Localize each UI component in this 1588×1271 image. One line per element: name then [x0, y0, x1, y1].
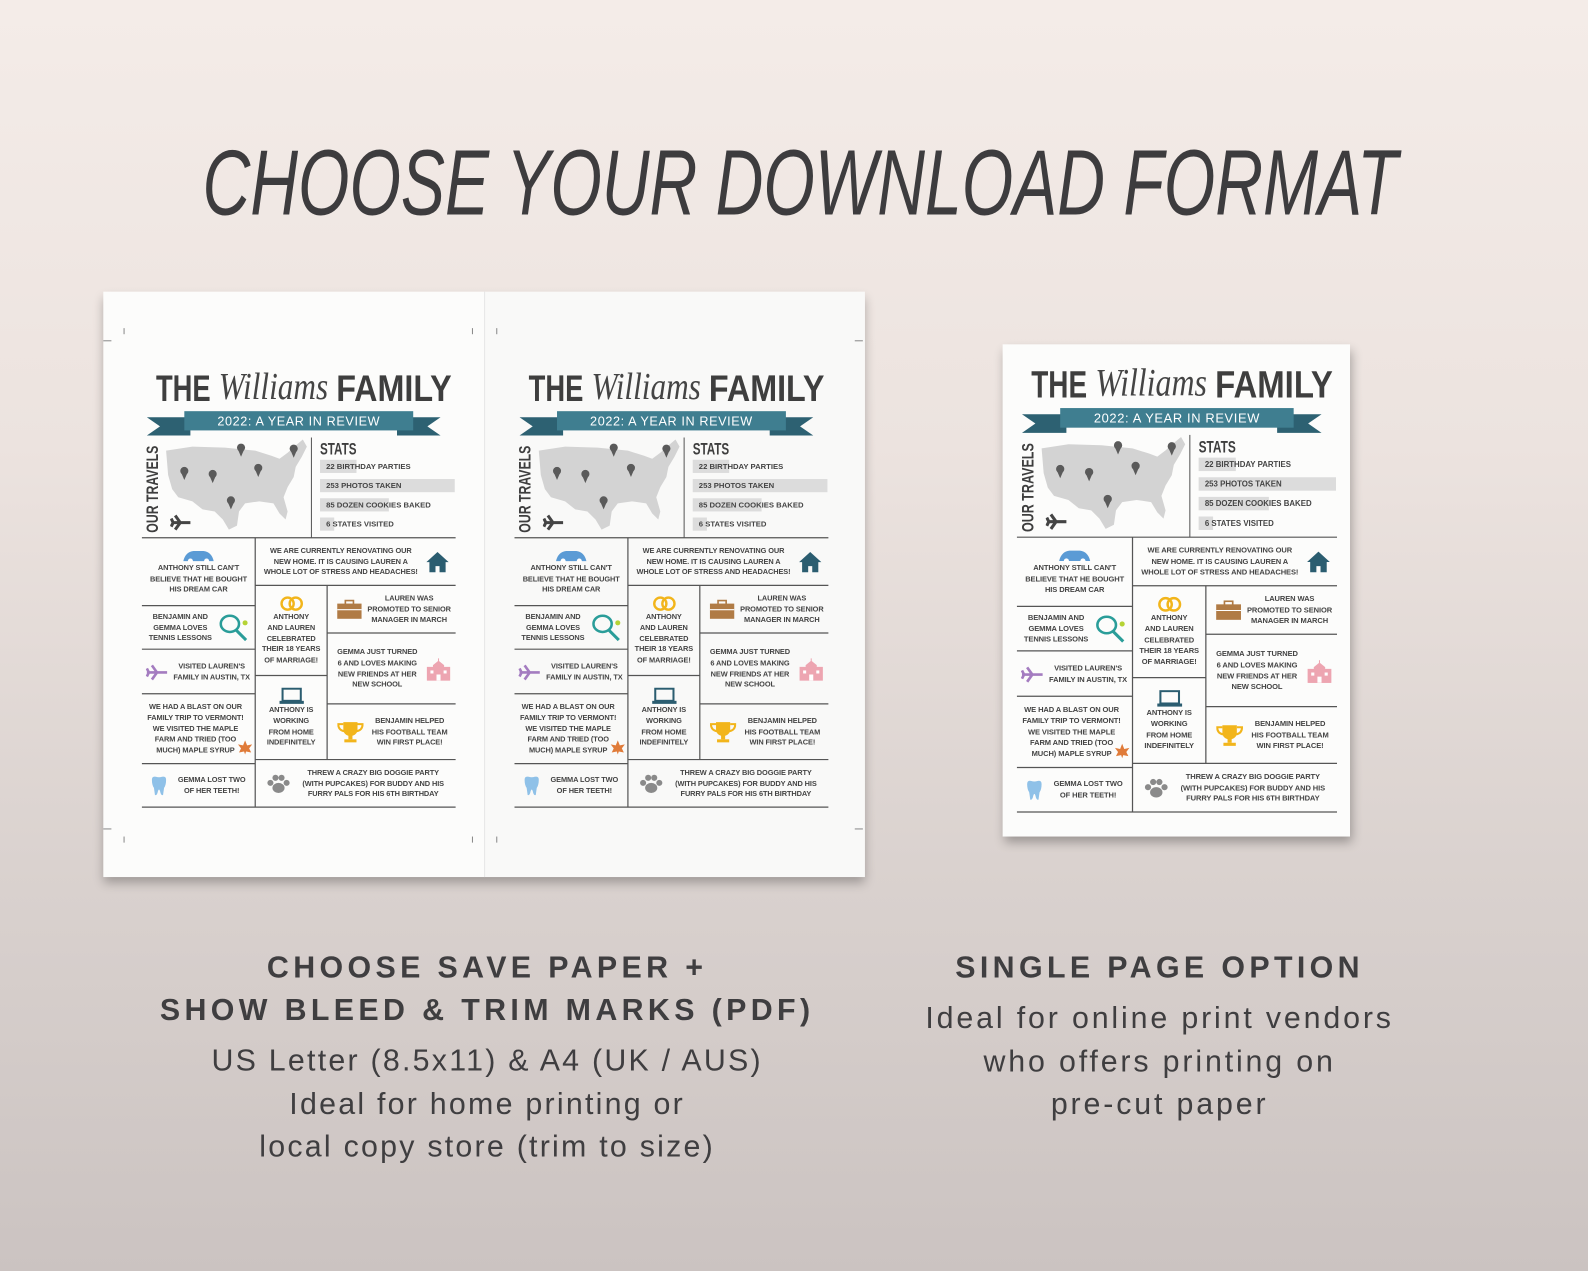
cell: school: NEW SCHOOL — [725, 680, 775, 689]
cell: austin — [146, 661, 250, 681]
cell: vermont: MUCH) MAPLE SYRUP — [1032, 749, 1112, 759]
stats panel: 253 PHOTOS TAKEN — [699, 481, 774, 490]
cell: vermont — [147, 701, 252, 755]
map with pins — [1037, 436, 1190, 537]
cell: car: ANTHONY STILL CAN'T — [1033, 563, 1116, 572]
cell: rings: CELEBRATED — [1144, 635, 1194, 644]
cell: paw — [267, 767, 444, 799]
cell: vermont: FARM AND TRIED (TOO — [527, 735, 609, 744]
text block: save paper option: Ideal for home printing or — [289, 1088, 685, 1121]
cell: school: 6 AND LOVES MAKING — [1217, 660, 1297, 669]
cell: laptop: ANTHONY IS — [1147, 707, 1192, 717]
cell: car: HIS DREAM CAR — [169, 585, 228, 594]
cell: tennis: GEMMA LOVES — [526, 622, 580, 631]
flyer title: Williams — [219, 366, 328, 408]
flyer title: Williams — [591, 366, 701, 408]
cell: vermont: FAMILY TRIP TO VERMONT! — [520, 713, 616, 722]
text block: save paper option: US Letter (8.5x11) & A4 (UK / AUS) — [211, 1044, 763, 1078]
cell: vermont: WE VISITED THE MAPLE — [153, 724, 238, 733]
cell: paw — [1134, 764, 1337, 812]
text block: single page option: SINGLE PAGE OPTION — [955, 951, 1364, 984]
cell: tooth — [1017, 769, 1133, 812]
cell: austin — [518, 661, 623, 681]
cell: trophy: WIN FIRST PLACE! — [377, 738, 443, 747]
cell: home: WE ARE CURRENTLY RENOVATING OUR — [1148, 545, 1292, 554]
cell: austin: FAMILY IN AUSTIN, TX — [546, 672, 623, 681]
cell: tooth: OF HER TEETH! — [1060, 790, 1116, 800]
cell: briefcase — [1207, 587, 1337, 634]
cell: briefcase: LAUREN WAS — [385, 593, 433, 602]
cell: home: NEW HOME. IT IS CAUSING LAUREN A — [646, 557, 781, 566]
ribbon banner — [147, 411, 440, 436]
cell: rings — [634, 596, 693, 665]
cell: laptop — [267, 688, 316, 747]
cell: vermont: FARM AND TRIED (TOO — [1030, 738, 1113, 747]
text block: save paper option: SHOW BLEED & TRIM MARKS (PDF) — [160, 994, 814, 1027]
stats panel: 85 DOZEN COOKIES BAKED — [1205, 499, 1312, 508]
text block: single page option: who offers printing on — [983, 1045, 1336, 1079]
cell: home — [1134, 538, 1337, 586]
cell: laptop — [640, 688, 688, 747]
cell: rings — [262, 596, 320, 665]
cell: vermont: MUCH) MAPLE SYRUP — [529, 746, 607, 755]
icon: plane — [1046, 512, 1068, 531]
cell: vermont — [520, 701, 625, 755]
stats panel: 22 BIRTHDAY PARTIES — [326, 462, 411, 471]
cell: vermont — [1017, 697, 1133, 768]
cell: paw — [640, 767, 817, 799]
cell: rings: THEIR 18 YEARS — [262, 645, 320, 654]
flyer: right page of two-page sheet — [514, 366, 828, 808]
cell: tooth: OF HER TEETH! — [557, 786, 612, 795]
cell: school — [337, 647, 450, 689]
cell: trophy: BENJAMIN HELPED — [375, 716, 444, 725]
cell: tennis: GEMMA LOVES — [1028, 623, 1084, 633]
stats panel: 85 DOZEN COOKIES BAKED — [326, 500, 431, 509]
cell: rings: ANTHONY — [646, 611, 682, 620]
cell: car: ANTHONY STILL CAN'T — [158, 563, 239, 572]
cell: rings: OF MARRIAGE! — [637, 656, 691, 665]
cell: rings: OF MARRIAGE! — [264, 656, 318, 665]
ribbon banner: 2022: A YEAR IN REVIEW — [217, 414, 380, 428]
cell: briefcase: MANAGER IN MARCH — [1251, 616, 1328, 625]
cell: laptop: ANTHONY IS — [642, 705, 686, 714]
cell: vermont: FAMILY TRIP TO VERMONT! — [147, 713, 244, 722]
cell: rings: CELEBRATED — [639, 634, 688, 643]
cell: trophy: HIS FOOTBALL TEAM — [1251, 730, 1329, 739]
cell: rings: AND LAUREN — [267, 622, 315, 632]
cell: briefcase — [710, 593, 824, 624]
cell: rings: ANTHONY — [273, 611, 309, 620]
cell: trophy — [710, 716, 820, 747]
cell: briefcase — [337, 593, 451, 624]
cell: vermont: FARM AND TRIED (TOO — [155, 735, 236, 744]
cell: tooth: GEMMA LOST TWO — [551, 775, 618, 784]
stats panel: 253 PHOTOS TAKEN — [1205, 479, 1282, 489]
cell: rings: ANTHONY — [1151, 612, 1187, 622]
cell: trophy: WIN FIRST PLACE! — [1257, 741, 1324, 750]
cell: laptop: INDEFINITELY — [640, 738, 688, 747]
cell: home: NEW HOME. IT IS CAUSING LAUREN A — [1151, 556, 1288, 566]
cell: laptop: FROM HOME — [1146, 730, 1192, 739]
ribbon banner: 2022: A YEAR IN REVIEW — [590, 414, 753, 428]
cell: austin — [1017, 652, 1133, 696]
cell: home: NEW HOME. IT IS CAUSING LAUREN A — [274, 557, 408, 566]
cell: school: NEW FRIENDS AT HER — [711, 669, 789, 678]
cell: home: WE ARE CURRENTLY RENOVATING OUR — [643, 545, 784, 555]
cell: home: WHOLE LOT OF STRESS AND HEADACHES! — [1141, 568, 1298, 577]
cell: school: GEMMA JUST TURNED — [337, 647, 417, 656]
stats panel — [1189, 435, 1337, 537]
cell: home — [264, 545, 449, 577]
cell: briefcase: MANAGER IN MARCH — [371, 615, 447, 624]
cell: paw: (WITH PUPCAKES) FOR BUDDY AND HIS — [302, 778, 444, 787]
cell: tennis: BENJAMIN AND — [525, 611, 581, 620]
flyer title — [1031, 362, 1333, 406]
cell: school: NEW SCHOOL — [1232, 682, 1282, 692]
cell: home: WHOLE LOT OF STRESS AND HEADACHES! — [264, 568, 418, 577]
cell: tennis — [521, 611, 620, 643]
cell: car: BELIEVE THAT HE BOUGHT — [1025, 574, 1124, 583]
cell: school: GEMMA JUST TURNED — [1216, 648, 1298, 658]
cell: laptop: WORKING — [1151, 719, 1187, 728]
cell: paw: THREW A CRAZY BIG DOGGIE PARTY — [307, 767, 439, 776]
text block: save paper option: CHOOSE SAVE PAPER + — [267, 951, 707, 984]
cell: austin: VISITED LAUREN'S — [1054, 663, 1122, 672]
cell: school: GEMMA JUST TURNED — [710, 647, 790, 656]
cell: vermont: WE HAD A BLAST ON OUR — [522, 701, 615, 711]
cell: briefcase: LAUREN WAS — [1265, 594, 1314, 603]
cell: tennis: TENNIS LESSONS — [149, 633, 212, 643]
cell: austin: VISITED LAUREN'S — [178, 661, 245, 670]
cell: paw: FURRY PALS FOR HIS 6TH BIRTHDAY — [1186, 794, 1320, 803]
flyer title — [528, 366, 824, 409]
cell: vermont: FAMILY TRIP TO VERMONT! — [1022, 715, 1121, 725]
cell: car: HIS DREAM CAR — [542, 585, 600, 594]
text block: single page option: Ideal for online print vendors — [925, 1002, 1394, 1035]
cell: paw: (WITH PUPCAKES) FOR BUDDY AND HIS — [1181, 783, 1325, 792]
cell: laptop: WORKING — [646, 716, 682, 725]
cell: car — [1017, 539, 1133, 605]
cell: paw: THREW A CRAZY BIG DOGGIE PARTY — [680, 767, 812, 776]
cell: briefcase: PROMOTED TO SENIOR — [740, 604, 824, 613]
flyer title: THE — [156, 367, 211, 409]
cell: car — [150, 551, 248, 594]
ribbon banner — [520, 411, 814, 436]
stats panel — [684, 438, 828, 538]
cell: vermont: MUCH) MAPLE SYRUP — [156, 746, 235, 755]
cell: paw: (WITH PUPCAKES) FOR BUDDY AND HIS — [675, 778, 817, 787]
cell: tooth: GEMMA LOST TWO — [178, 775, 246, 784]
stats panel: 6 STATES VISITED — [1205, 519, 1274, 528]
cell: tooth — [152, 775, 246, 796]
ribbon banner: 2022: A YEAR IN REVIEW — [1094, 411, 1260, 426]
cell: laptop: FROM HOME — [269, 727, 314, 736]
cell: vermont: WE HAD A BLAST ON OUR — [149, 701, 242, 711]
cell: vermont: WE VISITED THE MAPLE — [525, 724, 611, 733]
stats panel — [311, 438, 456, 538]
cell: laptop: ANTHONY IS — [269, 705, 313, 714]
cell: tennis: TENNIS LESSONS — [1024, 635, 1088, 644]
cell: austin: FAMILY IN AUSTIN, TX — [173, 672, 250, 681]
cell: laptop — [1133, 679, 1206, 763]
text block: save paper option: local copy store (trim to size) — [259, 1130, 715, 1164]
ribbon banner — [1022, 408, 1322, 433]
cell: austin: VISITED LAUREN'S — [551, 661, 618, 670]
cell: paw: FURRY PALS FOR HIS 6TH BIRTHDAY — [681, 789, 811, 799]
cell: car — [523, 551, 620, 594]
cell: school: NEW FRIENDS AT HER — [338, 669, 417, 678]
cell: austin: FAMILY IN AUSTIN, TX — [1049, 674, 1127, 683]
cell: trophy: HIS FOOTBALL TEAM — [372, 727, 448, 736]
cell: rings: THEIR 18 YEARS — [1139, 646, 1199, 655]
cell: trophy: HIS FOOTBALL TEAM — [744, 727, 820, 736]
cell: briefcase: MANAGER IN MARCH — [744, 615, 820, 624]
flyer: single page — [1016, 362, 1337, 813]
cell: car: BELIEVE THAT HE BOUGHT — [150, 574, 247, 583]
text block: single page option: pre-cut paper — [1051, 1088, 1268, 1121]
cell: rings: OF MARRIAGE! — [1142, 657, 1197, 667]
cell: home — [636, 545, 822, 577]
flyer title: THE — [1031, 364, 1087, 406]
map with pins — [166, 440, 307, 530]
cell: vermont: WE VISITED THE MAPLE — [1028, 727, 1115, 736]
text block: single page option — [906, 951, 1413, 1133]
cell: school — [1207, 635, 1337, 707]
cell: school: NEW FRIENDS AT HER — [1217, 671, 1297, 680]
flyer title: THE — [529, 367, 583, 409]
cell: tooth — [524, 775, 618, 796]
cell: tooth: OF HER TEETH! — [184, 786, 239, 795]
cell: tooth: GEMMA LOST TWO — [1054, 779, 1123, 788]
cell: trophy — [1207, 708, 1337, 763]
cell: briefcase: PROMOTED TO SENIOR — [1247, 605, 1332, 614]
panel: two-page sheet — [103, 292, 865, 877]
icon: plane — [170, 514, 190, 530]
cell: laptop: FROM HOME — [641, 727, 686, 736]
cell: briefcase: PROMOTED TO SENIOR — [367, 604, 451, 613]
cell: car: BELIEVE THAT HE BOUGHT — [523, 574, 620, 583]
cell: tennis — [148, 611, 248, 643]
cell: home: WHOLE LOT OF STRESS AND HEADACHES! — [637, 568, 790, 577]
cell: tennis: BENJAMIN AND — [153, 611, 208, 620]
cell: rings: CELEBRATED — [267, 634, 316, 643]
cell: trophy: WIN FIRST PLACE! — [749, 738, 815, 747]
cell: car: ANTHONY STILL CAN'T — [531, 563, 612, 572]
cell: school: 6 AND LOVES MAKING — [338, 658, 417, 667]
cell: rings: THEIR 18 YEARS — [635, 645, 693, 654]
cell: school: NEW SCHOOL — [352, 680, 402, 689]
cell: trophy — [337, 716, 448, 747]
stats panel: 85 DOZEN COOKIES BAKED — [699, 500, 804, 509]
cell: tennis — [1017, 607, 1133, 651]
stats panel: 22 BIRTHDAY PARTIES — [1205, 460, 1291, 469]
cell: tennis: TENNIS LESSONS — [521, 633, 584, 643]
cell: rings: AND LAUREN — [1145, 624, 1194, 633]
text block: save paper option — [81, 951, 893, 1174]
stats panel: 6 STATES VISITED — [699, 520, 766, 529]
cell: car: HIS DREAM CAR — [1045, 585, 1104, 594]
icon: plane — [542, 514, 564, 530]
stats panel: 253 PHOTOS TAKEN — [326, 481, 401, 490]
cell: paw: FURRY PALS FOR HIS 6TH BIRTHDAY — [308, 789, 439, 799]
cell: school: 6 AND LOVES MAKING — [710, 658, 790, 667]
cell: tennis: BENJAMIN AND — [1028, 612, 1084, 621]
cell: trophy: BENJAMIN HELPED — [748, 716, 817, 725]
cell: briefcase: LAUREN WAS — [758, 593, 806, 602]
cell: laptop: INDEFINITELY — [267, 738, 315, 747]
cell: paw: THREW A CRAZY BIG DOGGIE PARTY — [1186, 771, 1320, 781]
map with pins — [538, 440, 680, 530]
cell: rings — [1133, 587, 1206, 678]
flyer: left page — [142, 366, 456, 808]
cell: laptop: INDEFINITELY — [1144, 741, 1194, 750]
cell: laptop: WORKING — [273, 716, 309, 725]
cell: tennis: GEMMA LOVES — [153, 622, 207, 631]
stats panel: 22 BIRTHDAY PARTIES — [699, 462, 783, 471]
cell: rings: AND LAUREN — [640, 622, 688, 632]
cell: vermont: WE HAD A BLAST ON OUR — [1024, 704, 1119, 713]
panel: single page sheet — [1003, 344, 1350, 837]
flyer title: Williams — [1095, 362, 1207, 405]
cell: school — [710, 647, 823, 689]
flyer title — [156, 366, 452, 409]
stats panel: 6 STATES VISITED — [326, 520, 394, 529]
cell: trophy: BENJAMIN HELPED — [1255, 719, 1325, 728]
cell: home: WE ARE CURRENTLY RENOVATING OUR — [270, 545, 412, 555]
